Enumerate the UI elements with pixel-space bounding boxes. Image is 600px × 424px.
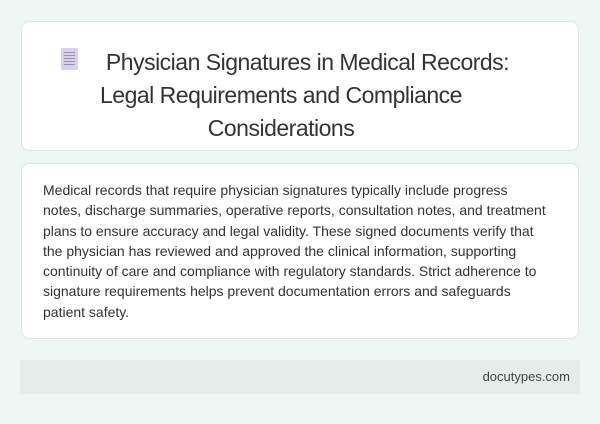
footer text: docutypes.com bbox=[483, 369, 570, 384]
description panel bbox=[21, 163, 579, 339]
icon: document bbox=[61, 48, 78, 70]
footer bar bbox=[20, 360, 580, 394]
title: Physician Signatures in Medical Records: Legal Requirements and Compliance Considerations bbox=[100, 49, 509, 141]
header card bbox=[21, 21, 579, 151]
body text: Medical records that require physician signatures typically include progress notes, discharge summaries, operative reports, consultation notes, and treatment plans to ensure accuracy and legal validity. These signed documents verify that the physician has reviewed and approved the clinical information, supporting continuity of care and compliance with regulatory standards. Strict adherence to signature requirements helps prevent documentation errors and safeguards patient safety. bbox=[43, 182, 546, 320]
